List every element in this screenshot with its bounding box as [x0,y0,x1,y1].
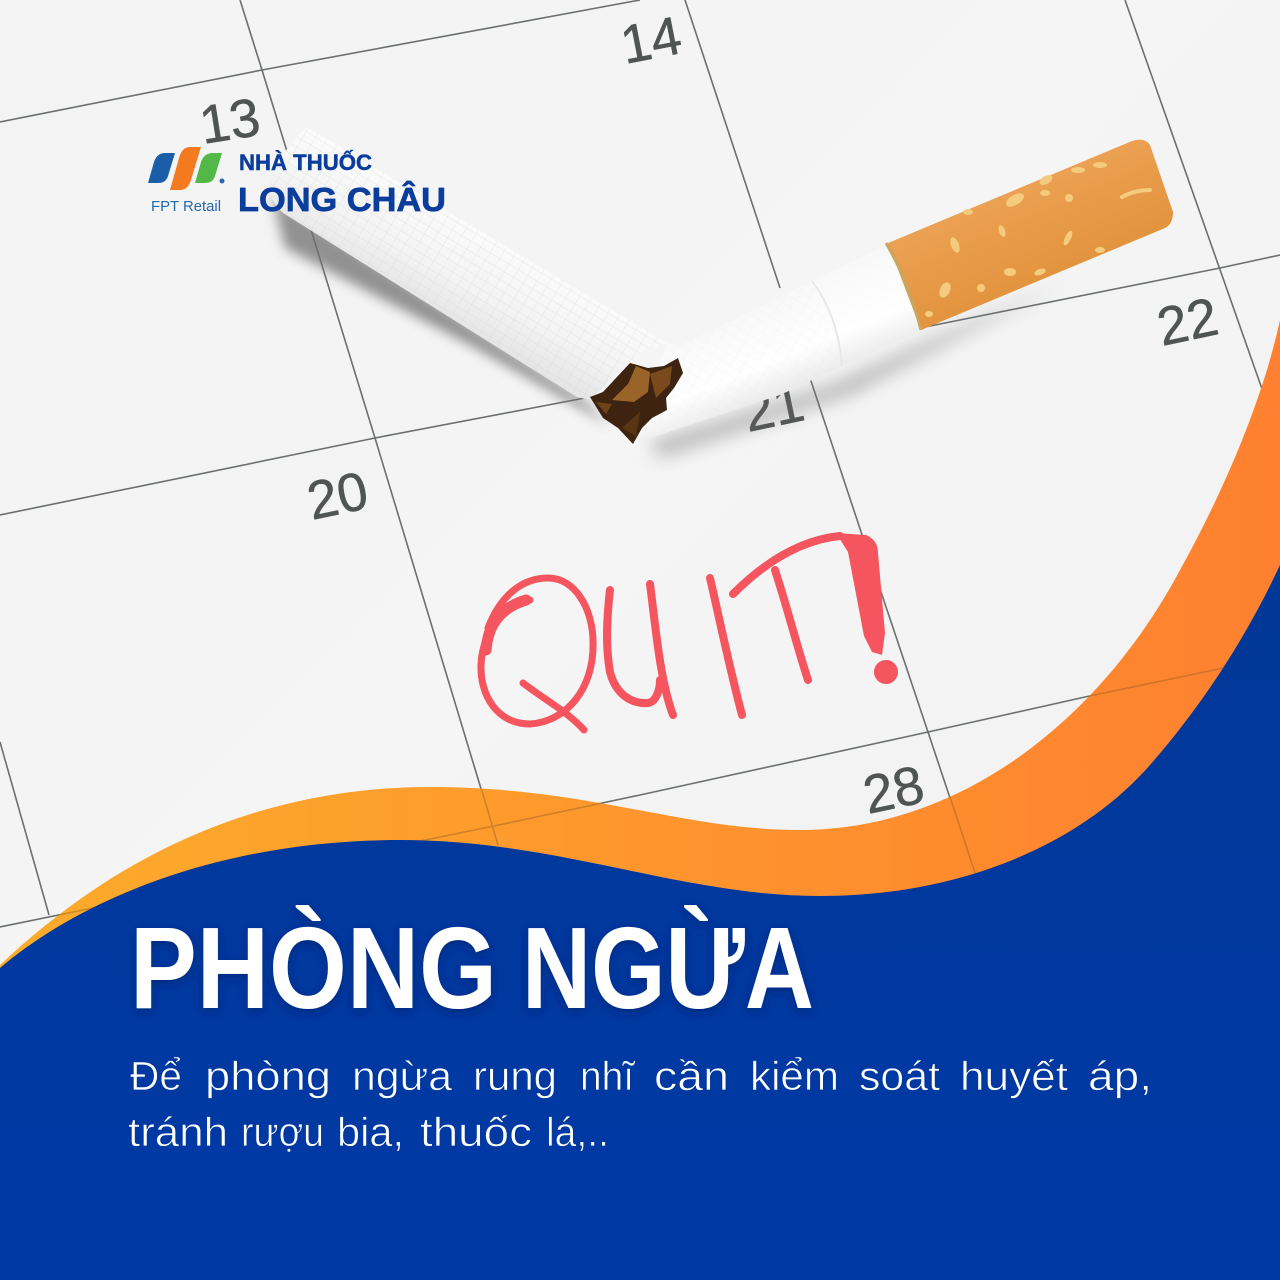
description text: rung [473,1053,557,1099]
exclamation mark [836,533,898,684]
letter U [607,584,673,715]
letter T [733,536,840,680]
description text: soát [859,1053,941,1099]
description text: áp, [1088,1053,1152,1099]
description text: cần [654,1053,729,1099]
orange wave [0,320,1280,1000]
blue wave panel [0,565,1280,1280]
letter I [710,578,742,715]
calendar dates: 13 [195,87,264,156]
description text: ngừa [352,1053,452,1099]
description text: kiểm [750,1053,839,1099]
FPT Retail label: FPT Retail [151,198,221,215]
calendar dates: 20 [302,461,373,532]
description text [128,1053,1152,1155]
letter Q [481,578,593,730]
broken cigarette [270,127,1173,458]
calendar dates: 14 [616,5,686,76]
description text: bia, [337,1109,404,1155]
Nhà thuốc: NHÀ THUỐC [239,149,372,175]
calendar dates: 22 [1152,287,1223,358]
calendar dates [195,5,1223,826]
calendar grid lines [0,0,1280,927]
cigarette left segment [270,127,667,400]
FPT logo mark [148,147,224,190]
description text: tránh [128,1109,228,1155]
filter speckles [925,162,1150,317]
description text: nhĩ [580,1053,636,1099]
calendar dates: 28 [858,755,929,826]
Long Châu: LONG CHÂU [238,181,446,218]
calendar dates: 21 [738,373,809,444]
handwritten QUIT! [481,533,898,730]
description text: Để [130,1053,182,1099]
description text: lá,.. [546,1109,609,1155]
description text: phòng [205,1053,331,1099]
description text: thuốc [420,1109,532,1155]
description text: huyết [960,1053,1069,1099]
title: PHÒNG [130,903,497,1033]
tobacco [590,358,683,444]
description text: rượu [241,1109,324,1155]
cigarette right segment [632,245,921,440]
title [130,903,814,1033]
title: NGỪA [522,903,814,1033]
cigarette filter [886,140,1173,330]
cigarette shadow [272,195,1165,458]
logo: FPT Retail / Nhà thuốc Long Châu [148,147,446,218]
